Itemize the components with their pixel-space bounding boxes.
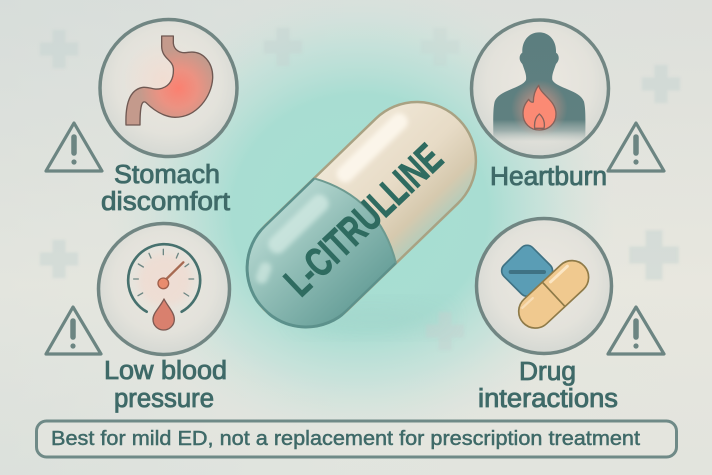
note text: Best for mild ED, not a replacement for prescription treatment [51, 427, 640, 450]
pill shadow [294, 306, 450, 330]
label [478, 358, 618, 413]
label: interactions [478, 385, 618, 413]
icon: gauge with blood drop [128, 244, 200, 330]
label: Low blood [104, 357, 227, 385]
label [104, 357, 227, 413]
icon: stomach [123, 36, 213, 125]
panel: heartburn [472, 20, 664, 191]
icon: tablet and capsule [498, 242, 596, 335]
capsule teal half [248, 180, 395, 326]
warning triangle [46, 123, 102, 171]
panel: stomach discomfort [46, 20, 237, 216]
capsule outline [223, 78, 500, 351]
label: pressure [114, 385, 214, 413]
icon: person with flame [493, 32, 585, 142]
warning triangle [46, 307, 101, 354]
icon circle [472, 20, 608, 157]
faint medical crosses [40, 28, 680, 350]
label: discomfort [101, 188, 230, 216]
warning triangle [608, 123, 664, 171]
label: Drug [519, 358, 576, 386]
label: Stomach [114, 161, 220, 189]
label: Heartburn [490, 163, 607, 191]
warning triangle [608, 307, 664, 354]
capsule highlights [239, 110, 422, 289]
callout: note bar [36, 421, 676, 457]
panel: drug interactions [476, 218, 664, 413]
capsule teal outline [246, 178, 397, 328]
icon circle [98, 224, 230, 354]
icon circle [100, 20, 237, 156]
icon circle [476, 218, 612, 354]
capsule beige half [223, 78, 500, 351]
capsule seam [314, 167, 408, 263]
capsule label: L-CITRULLINE [275, 135, 451, 305]
central capsule: L-Citrulline [246, 100, 478, 328]
panel: low blood pressure [46, 224, 230, 413]
label [101, 161, 230, 216]
